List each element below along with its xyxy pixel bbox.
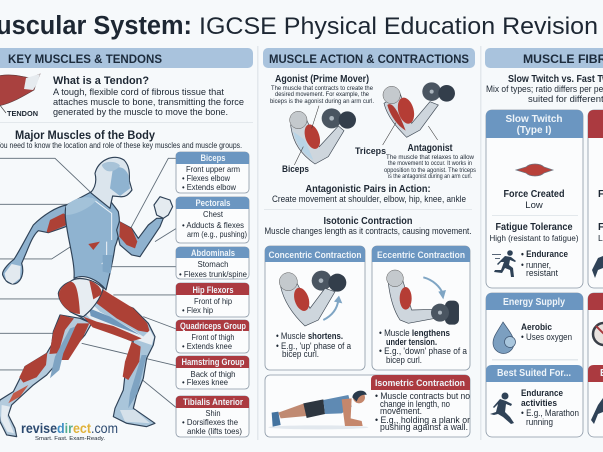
label: quadriceps (176, 320, 249, 353)
label: abdominals: • Flexes trunk/spine (179, 269, 247, 279)
label: abdominals (176, 247, 249, 279)
label: tibialis: ankle (lifts toes) (187, 426, 242, 436)
label: hamstring: Hamstring Group (182, 357, 245, 367)
card: slow twitch (486, 110, 583, 288)
text: antagonistic pairs (272, 183, 466, 204)
back arm (3, 205, 72, 284)
panel: muscle fibres (485, 48, 603, 437)
card: best suited: Best Suited For... (497, 368, 571, 379)
card: concentric: Concentric Contraction (268, 250, 362, 261)
text: what is a tendon: A tough, flexible cord of fibrous tissue that (53, 87, 224, 97)
illustration: agonist arm (290, 106, 356, 165)
text: agonist: The muscle that contracts to create the (271, 86, 374, 92)
text: isotonic contraction: Muscle changes length as it contracts, causing movement. (264, 226, 472, 236)
text: agonist: Agonist (Prime Mover) (275, 73, 369, 85)
card: slow twitch: Slow Twitch (505, 114, 563, 125)
text: isotonic contraction: Isotonic Contraction (324, 215, 412, 227)
card: best suited: activities (521, 398, 557, 408)
card: slow twitch: • runner, (521, 260, 551, 270)
label: abdominals: Stomach (198, 259, 229, 269)
label: biceps (176, 152, 249, 193)
icon: runner (490, 392, 514, 424)
label: pectorals: arm (e.g., pushing) (187, 229, 247, 239)
head (91, 157, 132, 208)
card: slow twitch: • Endurance (521, 249, 568, 259)
label: biceps: • Flexes elbow (182, 173, 231, 183)
card: fast twitch (cropped) (588, 110, 603, 437)
label: hamstring: Back of thigh (190, 369, 236, 379)
heading: major muscles: Major Muscles of the Body (15, 130, 156, 142)
icon: tendon muscle (0, 74, 40, 118)
icon: concentric arm (279, 271, 346, 326)
illustration: runner anatomy (0, 157, 173, 437)
label: tibialis: Tibialis Anterior (183, 397, 244, 407)
text: agonist (270, 73, 374, 105)
label: pectorals: • Adducts & flexes (182, 220, 244, 230)
text: what is a tendon: attaches muscle to bone, transmitting the force (53, 97, 244, 107)
heading: key muscles: KEY MUSCLES & TENDONS (8, 54, 162, 66)
card: slow twitch: resistant (526, 268, 559, 278)
card: isometric: • Muscle contracts but no (375, 391, 470, 401)
card: energy supply: Aerobic (521, 322, 552, 332)
text: isotonic contraction (264, 215, 472, 236)
card: isometric: pushing against a wall. (380, 422, 468, 432)
label: quadriceps: Quadriceps Group (180, 321, 247, 331)
label: hip flexors: Hip Flexors (192, 285, 234, 295)
card: best suited: • E.g., Marathon (521, 408, 579, 418)
label: hip flexors (176, 283, 249, 317)
label: pectorals: Pectorals (196, 198, 231, 208)
card: energy supply (486, 293, 583, 437)
torso (65, 192, 119, 290)
label: abdominals: Abdominals (191, 248, 235, 258)
front leg (70, 282, 155, 427)
icon: plank figure (268, 391, 368, 429)
label: quadriceps: • Extends knee (182, 341, 232, 351)
label: pectorals: Chest (203, 209, 224, 219)
front arm (117, 197, 173, 257)
card: slow twitch: High (resistant to fatigue) (490, 233, 579, 243)
label: biceps: • Extends elbow (182, 182, 237, 192)
card: isometric (265, 375, 470, 437)
card: energy supply: Energy Supply (503, 297, 565, 308)
heading: major muscles: You need to know the location and role of these key muscles and muscle groups. (0, 141, 242, 150)
icon: eccentric arm (387, 270, 459, 325)
text: antagonist: Antagonist (408, 143, 453, 154)
logo: Smart. Fast. Exam-Ready. (35, 436, 105, 442)
text: antagonist: opposition to the agonist. The triceps (384, 168, 476, 174)
card: concentric: • Muscle shortens. (276, 331, 343, 341)
panel: key muscles and tendons (0, 48, 253, 442)
icon: tendon muscle: TENDON (7, 109, 38, 118)
label: hip flexors: • Flex hip (182, 305, 213, 315)
label: biceps: Biceps (282, 164, 309, 175)
text: antagonist: is the antagonist during an arm curl. (388, 174, 472, 180)
card: energy supply: • Uses oxygen (521, 332, 572, 342)
hips (58, 279, 103, 317)
heading: muscle action: MUSCLE ACTION & CONTRACTIONS (269, 54, 469, 66)
card: concentric (265, 246, 365, 370)
panel: muscle action and contractions (263, 48, 476, 437)
title (0, 12, 598, 40)
card: best suited: Endurance (521, 388, 563, 398)
label: hamstring (176, 356, 249, 389)
heading: major muscles (0, 130, 242, 150)
text: slow vs fast (486, 73, 603, 104)
card: slow twitch: Force Created (504, 189, 564, 200)
card: isometric: Isometric Contraction (375, 378, 465, 389)
text: antagonistic pairs: Create movement at shoulder, elbow, hip, knee, ankle (272, 194, 466, 204)
card: slow twitch: Low (525, 200, 543, 211)
heading: key muscles (0, 48, 253, 68)
card: slow twitch: Fatigue Tolerance (496, 222, 573, 233)
text: agonist: biceps is the agonist during an arm curl. (270, 99, 374, 105)
label: triceps: Triceps (355, 146, 386, 157)
icon: runner (492, 250, 516, 277)
text: antagonist (384, 143, 476, 180)
card: eccentric (372, 246, 470, 370)
icon: muscle (516, 164, 553, 176)
text: agonist: desired movement. For example, the (275, 92, 370, 98)
card: isometric: movement. (380, 406, 422, 416)
card: isometric: • E.g., holding a plank or (375, 415, 470, 425)
card: eccentric: bicep curl. (386, 355, 422, 365)
card: fast twitch (cropped): L (598, 233, 603, 243)
illustration: antagonist arm (383, 82, 455, 145)
label: pectorals (176, 197, 249, 243)
label: quadriceps: Front of thigh (192, 332, 235, 342)
icon: water drop (493, 322, 516, 354)
title: IGCSE Physical Education Revision (199, 13, 598, 40)
label: hip flexors: Front of hip (194, 296, 232, 306)
label: hamstring: • Flexes knee (182, 377, 228, 387)
label: biceps: Biceps (200, 153, 226, 163)
leader lines (0, 158, 176, 408)
label: tibialis: • Dorsiflexes the (182, 417, 238, 427)
heading: muscle fibres (485, 48, 603, 68)
card: best suited: running (526, 417, 553, 427)
card: slow twitch: (Type I) (517, 125, 551, 136)
text: what is a tendon: generated by the muscle to move the bone. (53, 107, 228, 117)
label: tibialis (176, 396, 249, 437)
card: best suited (486, 365, 583, 427)
card: concentric: bicep curl. (282, 349, 319, 359)
text: antagonist: The muscle that relaxes to allow (386, 155, 475, 161)
card: eccentric: • Muscle lengthens (379, 328, 450, 338)
card: eccentric: • E.g., 'down' phase of a (379, 346, 467, 356)
back leg (0, 315, 92, 437)
text: what is a tendon: What is a Tendon? (53, 75, 149, 87)
card: concentric: • E.g., 'up' phase of a (276, 341, 351, 351)
text: what is a tendon (53, 75, 244, 117)
card: isometric: change in length, no (380, 399, 450, 409)
text: antagonistic pairs: Antagonistic Pairs in Action: (306, 183, 430, 195)
text: antagonist: the movement to occur. It works in (388, 161, 472, 167)
card: eccentric: Eccentric Contraction (377, 250, 465, 261)
heading: muscle action (263, 48, 475, 68)
label: biceps: Front upper arm (186, 164, 240, 174)
card: eccentric: under tension. (386, 337, 437, 347)
label: tibialis: Shin (206, 408, 221, 418)
logo: revisedirect.com (21, 420, 118, 436)
